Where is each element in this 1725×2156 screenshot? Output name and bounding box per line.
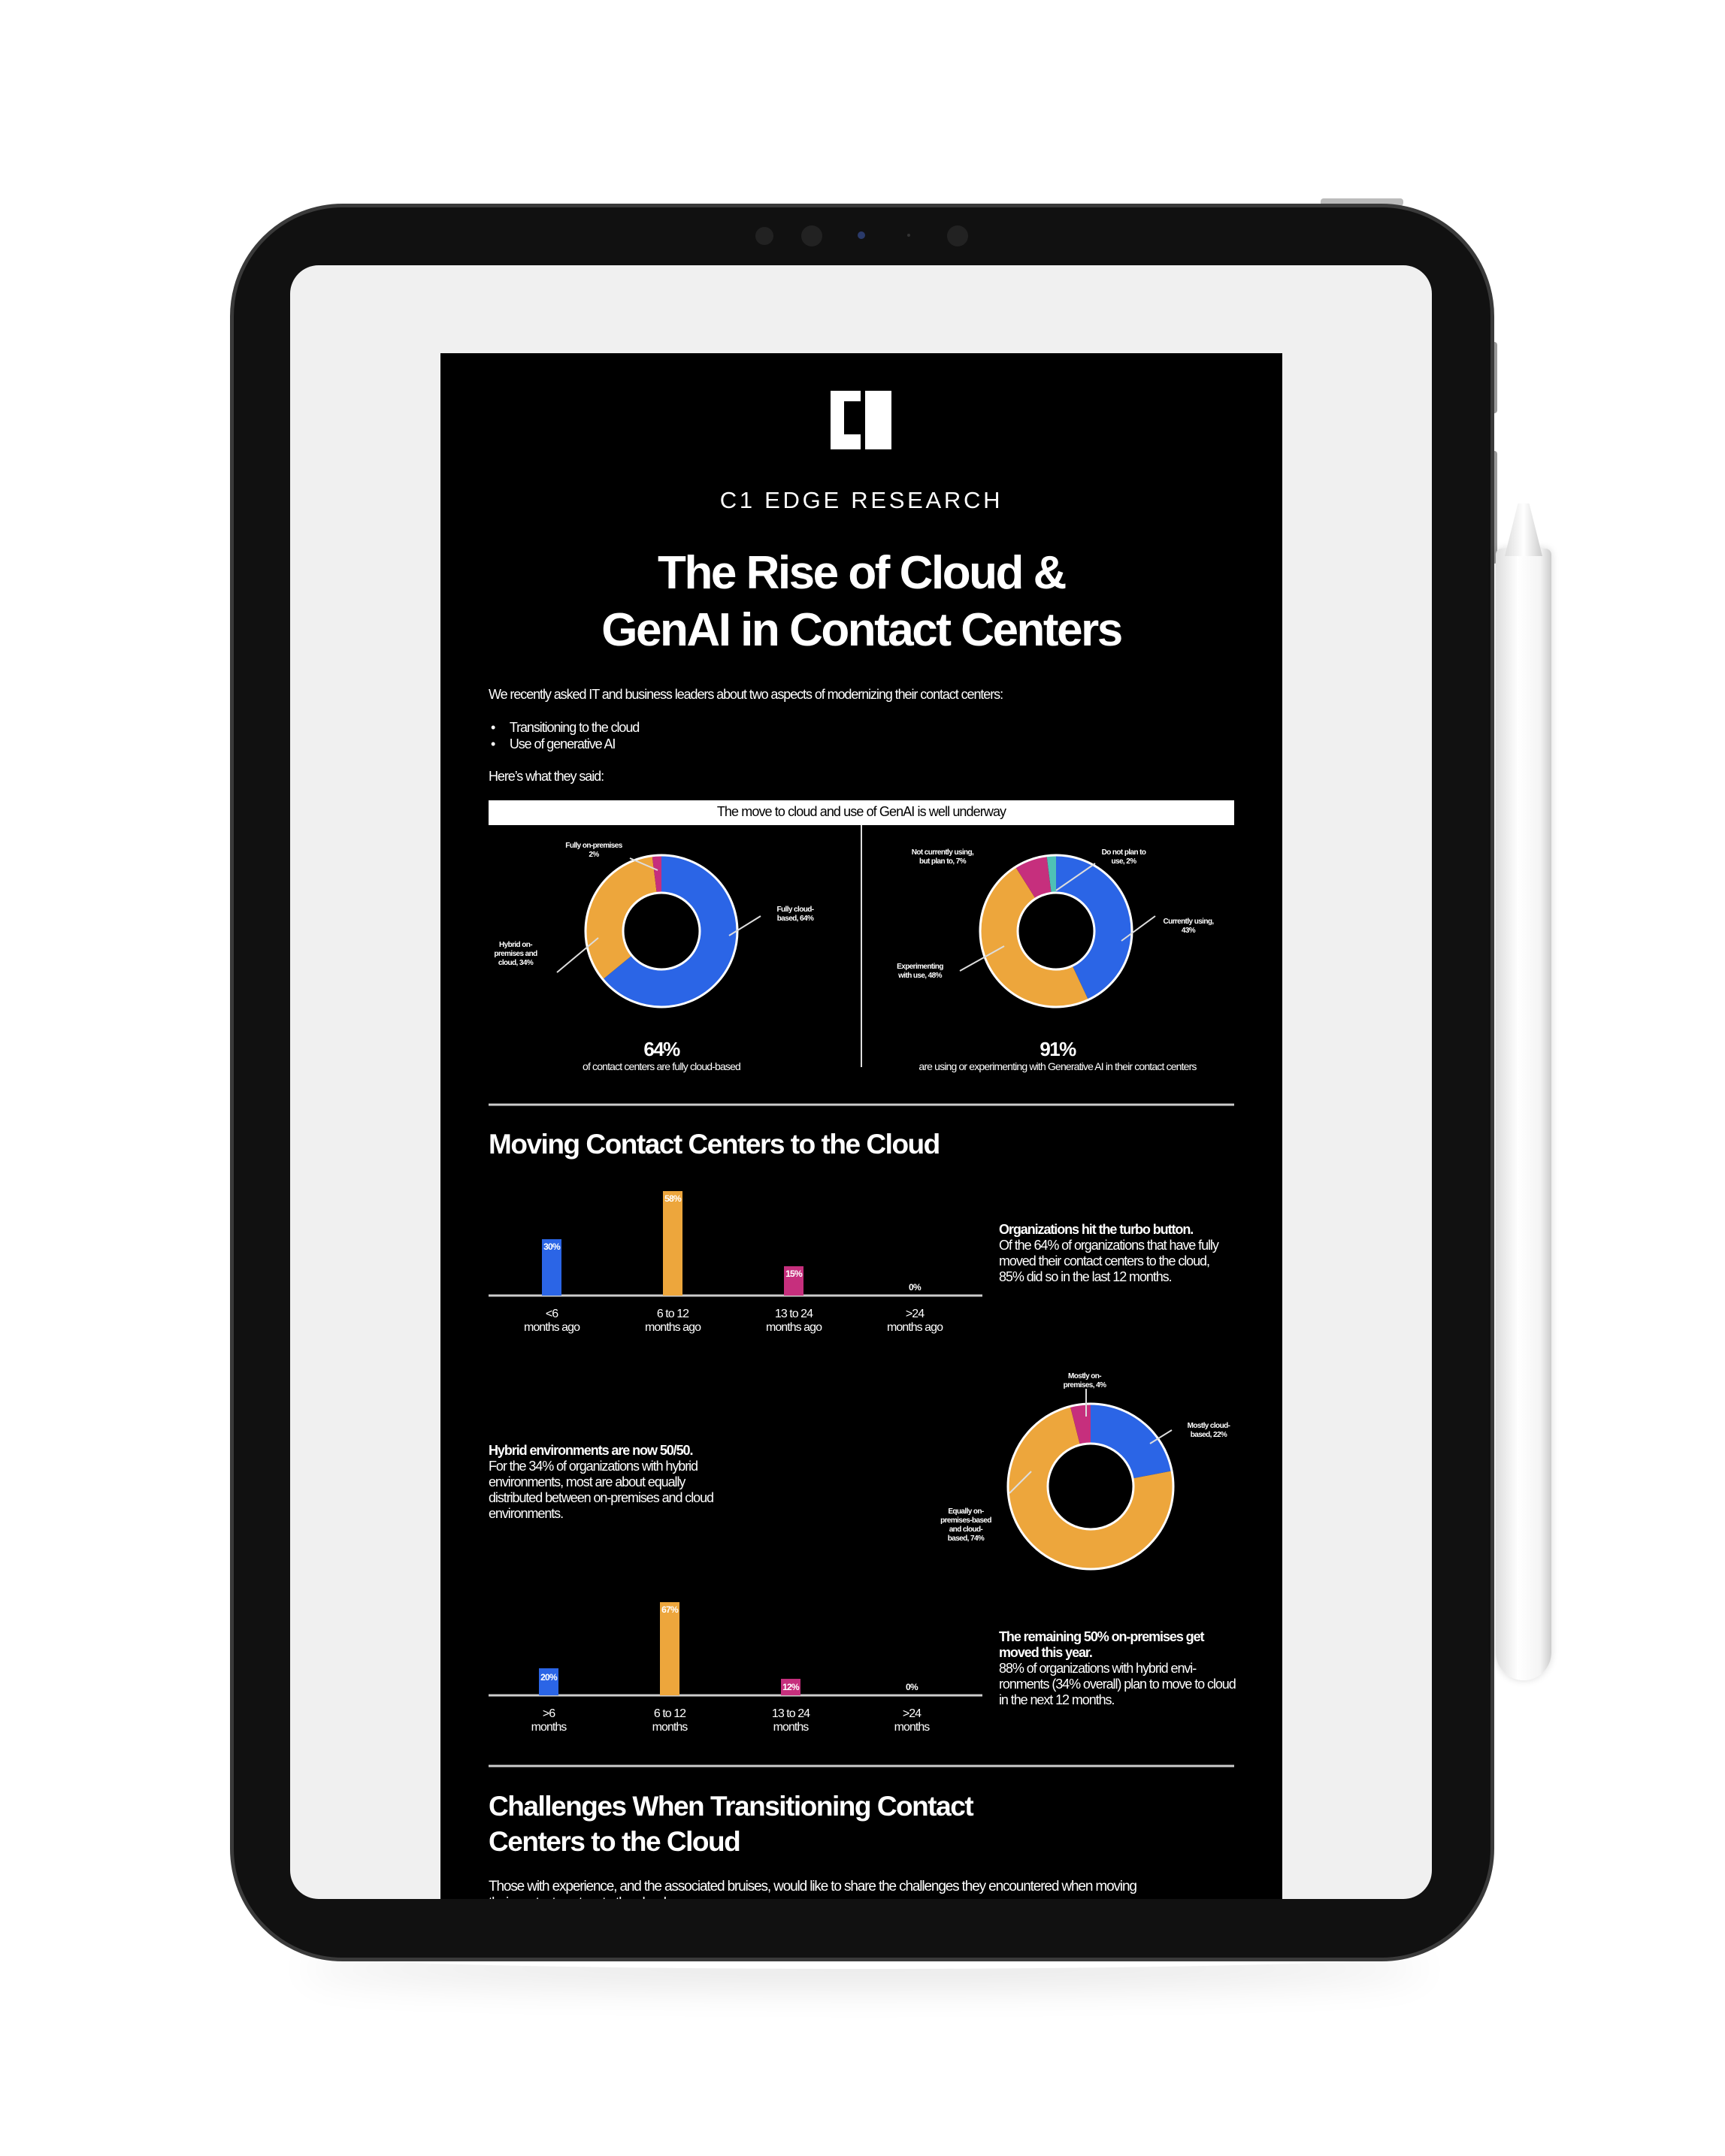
donut 3 labels (940, 1372, 1230, 1543)
donut labels left: Hybrid on- (499, 941, 532, 949)
donut labels right: with use, 48% (898, 972, 942, 980)
callout: hybrid: For the 34% of organizations with hybrid environments, most are about equally distributed between on-premises and cloud environments. (489, 1459, 713, 1521)
donut labels right: Experimenting (897, 963, 943, 971)
screen (290, 265, 1432, 1899)
callout: remaining (999, 1629, 1236, 1707)
bar chart 1 (489, 1191, 982, 1296)
challenges intro text: Those with experience, and the associated bruises, would like to share the challenges they encountered when moving (489, 1879, 1136, 1894)
tablet body (230, 204, 1494, 1961)
donut 3 labels: and cloud- (949, 1526, 982, 1534)
bar 1 labels: 15% (785, 1269, 802, 1279)
donut 3 labels: based, 22% (1191, 1431, 1227, 1439)
bar 2 labels: months (773, 1721, 808, 1734)
bar 2 labels: 0% (906, 1682, 918, 1692)
bar 2 labels: 12% (782, 1682, 799, 1692)
donut 3 labels: Mostly on- (1068, 1372, 1101, 1380)
section heading: challenges: Challenges When Transitioning Contact (489, 1791, 973, 1822)
banner (489, 800, 1234, 825)
bar 1 labels: <6 (546, 1308, 558, 1320)
section heading: challenges: Centers to the Cloud (489, 1826, 740, 1857)
bar 2 labels: 6 to 12 (654, 1707, 685, 1720)
donut labels left: premises and (494, 950, 537, 958)
section heading: cloud: Moving Contact Centers to the Cloud (489, 1129, 940, 1160)
donut labels left: of contact centers are fully cloud-based (583, 1060, 740, 1072)
stat 91%: 91% (1040, 1038, 1076, 1060)
donut labels left: Fully on-premises (565, 842, 622, 850)
donut: GenAI use (960, 855, 1155, 1007)
tablet shadow (301, 1939, 1428, 1969)
donut labels right: use, 2% (1111, 857, 1136, 866)
bar 2 labels (531, 1604, 930, 1734)
donut labels right: 43% (1182, 927, 1195, 935)
donut 3 labels: premises, 4% (1064, 1381, 1106, 1389)
bar 1 labels: 58% (664, 1193, 681, 1204)
bar chart 2 (489, 1602, 982, 1695)
bar 1 labels: 30% (543, 1241, 560, 1252)
callout: turbo: Organizations hit the turbo button. (999, 1222, 1193, 1237)
callout: turbo: Of the 64% of organizations that have fully moved their contact centers to the cloud, 85% did so in the last 12 months. (999, 1238, 1218, 1284)
title: GenAI in Contact Centers (601, 604, 1121, 656)
title: The Rise of Cloud & (658, 547, 1065, 599)
bar 1 labels: months ago (766, 1321, 822, 1334)
bar 2 labels: months (531, 1721, 566, 1734)
callout: hybrid: Hybrid environments are now 50/50. (489, 1443, 692, 1458)
bar 2 labels: months (894, 1721, 929, 1734)
section heading: challenges (489, 1791, 974, 1857)
bar 1 labels: 13 to 24 (775, 1308, 813, 1320)
stat 64%: 64% (643, 1038, 679, 1060)
donut: cloud status (557, 855, 761, 1007)
top button (1321, 198, 1403, 206)
bar 1 labels: >24 (906, 1308, 924, 1320)
bar 1 labels: months ago (887, 1321, 943, 1334)
donut labels right: are using or experimenting with Generative AI in their contact centers (918, 1060, 1197, 1072)
donut labels left: based, 64% (777, 915, 813, 923)
divider (861, 825, 862, 1067)
callout: remaining: The remaining 50% on-premises get moved this year. (999, 1629, 1203, 1660)
donut labels left: Fully cloud- (777, 906, 813, 914)
donut labels right (897, 848, 1214, 1072)
intro text (489, 687, 1003, 784)
bar 1 labels: months ago (524, 1321, 580, 1334)
donut labels right: Do not plan to (1102, 848, 1145, 857)
donut labels right: but plan to, 7% (919, 857, 966, 866)
donut labels left: cloud, 34% (498, 959, 533, 967)
donut 3 labels: premises-based (940, 1516, 991, 1525)
donut labels right: Currently using, (1163, 918, 1214, 926)
bar 2 labels: >24 (903, 1707, 921, 1720)
donut labels left: 2% (589, 851, 599, 859)
bar 2 labels: 13 to 24 (772, 1707, 810, 1720)
pencil (1494, 503, 1554, 1683)
intro text: We recently asked IT and business leaders about two aspects of modernizing their contact centers: (489, 687, 1003, 702)
logo (831, 391, 891, 449)
bar 1 labels (524, 1193, 943, 1334)
brand name: C1 EDGE RESEARCH (720, 487, 1003, 513)
bar 1 labels: 0% (909, 1282, 921, 1293)
title (601, 547, 1121, 656)
camera bar (755, 225, 968, 246)
banner: The move to cloud and use of GenAI is well underway (717, 804, 1006, 819)
donut labels right: Not currently using, (912, 848, 973, 857)
bar 2 labels: months (652, 1721, 687, 1734)
bar 1 labels: 6 to 12 (657, 1308, 688, 1320)
page: black document (440, 353, 1282, 1931)
intro text: • Use of generative AI (491, 736, 615, 751)
donut: hybrid split (1008, 1389, 1173, 1569)
intro text: • Transitioning to the cloud (491, 720, 639, 735)
donut 3 labels: based, 74% (948, 1535, 984, 1543)
donut 3 labels: Equally on- (948, 1507, 984, 1516)
bar 2 labels: 67% (661, 1604, 678, 1615)
callout: remaining: 88% of organizations with hybrid envi-ronments (34% overall) plan to move to cloud in the next 12 months. (999, 1661, 1236, 1707)
intro text: Here’s what they said: (489, 769, 604, 784)
donut 3 labels: Mostly cloud- (1188, 1422, 1230, 1430)
donut labels left (494, 842, 814, 1072)
bar 1 labels: months ago (645, 1321, 701, 1334)
bar 2 labels: >6 (543, 1707, 555, 1720)
bar 2 labels: 20% (540, 1672, 557, 1683)
side buttons (1490, 342, 1497, 413)
